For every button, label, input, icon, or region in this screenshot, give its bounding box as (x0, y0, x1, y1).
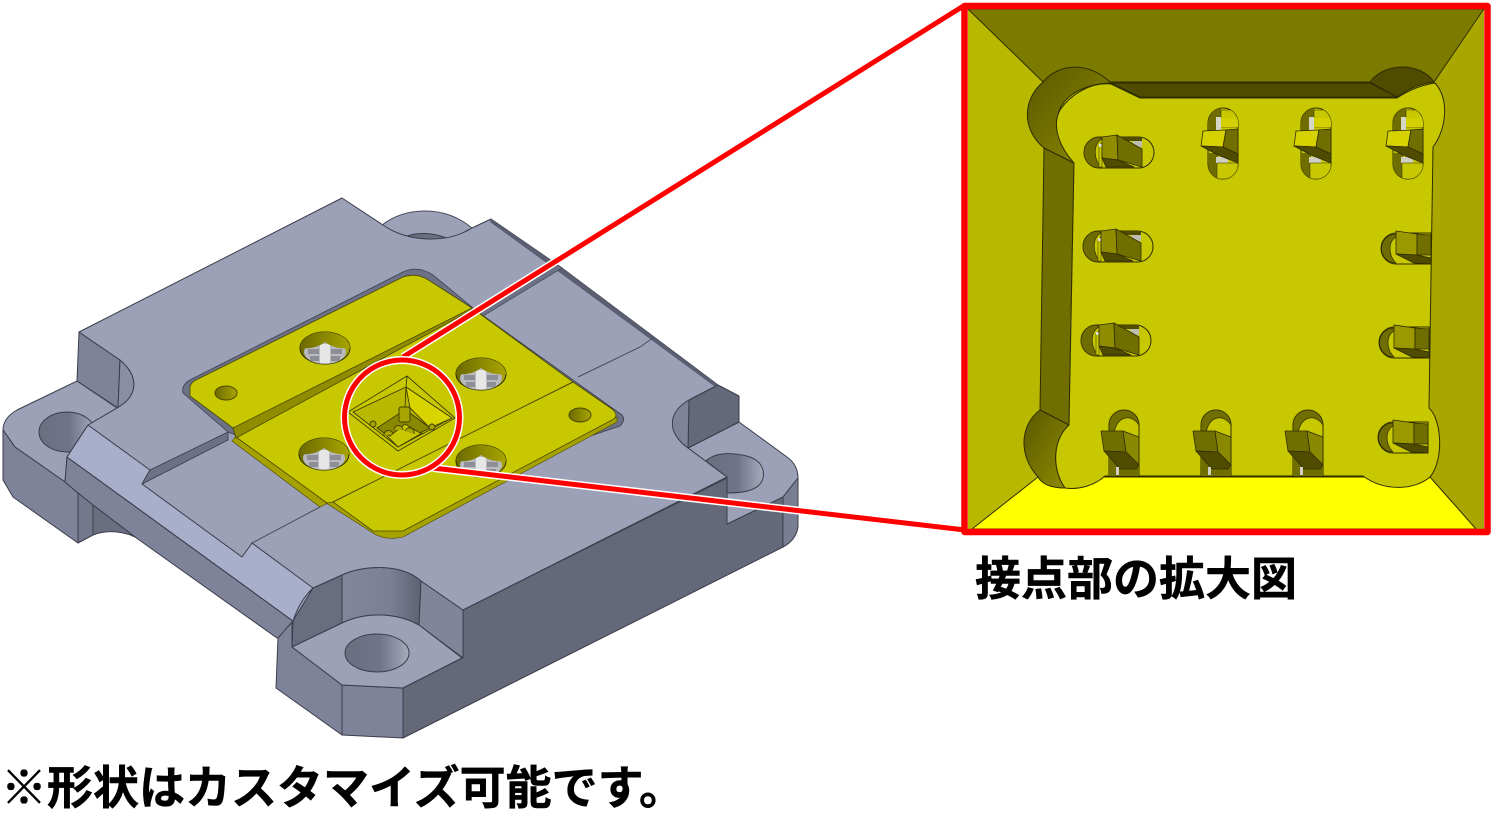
right inner face (1430, 12, 1484, 529)
plate recess (183, 269, 624, 500)
red frame (964, 6, 1488, 532)
left ear side wall (3, 430, 78, 543)
top-right edge wall (490, 219, 718, 386)
top contacts (1201, 108, 1423, 179)
top inner face (968, 9, 1484, 82)
screw top-left (300, 332, 350, 364)
central contact plate face (1056, 83, 1445, 488)
main top surface (67, 198, 727, 621)
right ear (688, 422, 798, 547)
left contacts (1081, 135, 1154, 356)
lower-left wedge cut (142, 432, 228, 484)
right contacts (1378, 231, 1431, 453)
magnified contact view panel (964, 6, 1488, 532)
top-left corner arc (1027, 67, 1111, 163)
strip lower wall (65, 457, 293, 647)
groove band (233, 308, 472, 438)
front octagonal seat walls (276, 567, 463, 738)
plate top face (190, 275, 616, 531)
note: customizable shape: ※形状はカスタマイズ可能です。 (1, 762, 685, 814)
top-left block wall (77, 332, 134, 408)
left recess back wall (93, 505, 135, 537)
top-right corner arc (1370, 67, 1434, 97)
yellow contact plate (190, 275, 617, 538)
locating hole right (569, 408, 591, 422)
locating hole left (215, 386, 237, 400)
screw bottom-right (456, 445, 506, 477)
fold line (333, 382, 573, 502)
left wall band (1040, 148, 1074, 425)
callout circle (344, 360, 460, 475)
isometric view of socket assembly (3, 198, 798, 738)
callout lines to magnified view (403, 5, 965, 530)
bottom-left corner arc (1024, 410, 1069, 488)
plate lower side (326, 417, 617, 538)
lower surface divider lines (252, 338, 653, 543)
right side wall, dark (403, 478, 783, 738)
bottom contacts (1101, 410, 1323, 476)
light chamfer strip (67, 425, 313, 621)
socket opening (348, 376, 455, 451)
caption: magnified contact: 接点部の拡大図 (975, 553, 1297, 605)
edge notch wedge (476, 261, 562, 318)
screw bottom-left (299, 438, 349, 470)
plate lower-left side (232, 436, 330, 507)
right block wall (672, 385, 739, 448)
rear mounting ear (382, 211, 472, 245)
screw top-right (456, 358, 506, 390)
top groove (1111, 83, 1397, 97)
bottom inner face (972, 477, 1476, 529)
left inner wall (78, 493, 93, 543)
left ear (3, 381, 117, 482)
left inner face (968, 9, 1484, 529)
